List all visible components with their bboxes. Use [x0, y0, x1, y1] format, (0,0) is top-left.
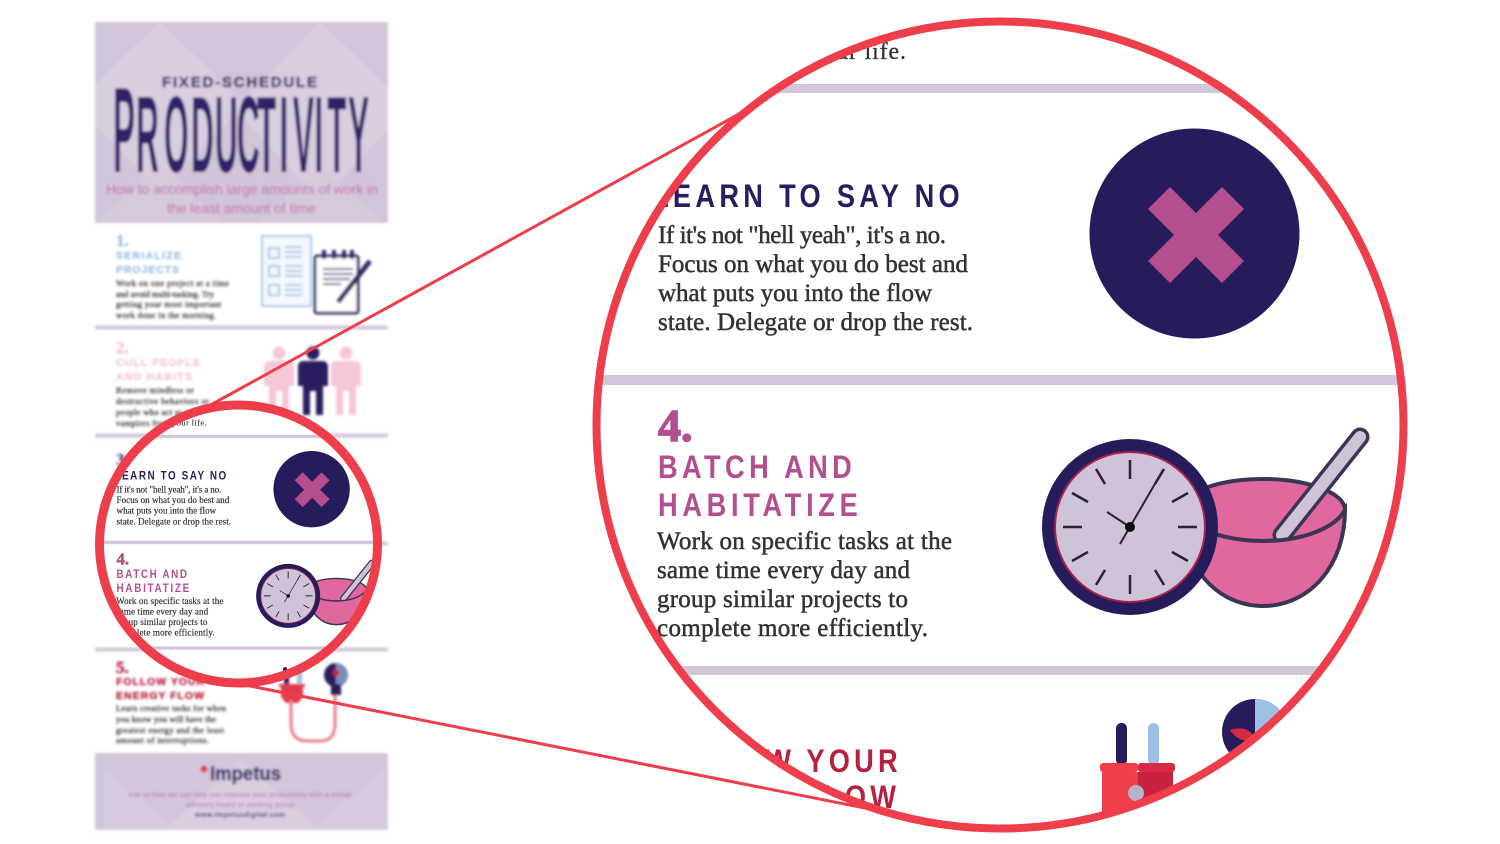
- section 1: serialize projects: 1.: [116, 231, 129, 250]
- section 5: follow your energy flow: greatest energy and the least: [116, 725, 225, 735]
- icon: plug and bulb with cord: [279, 663, 348, 741]
- section 5: follow your energy flow: amount of interruptions.: [116, 735, 209, 745]
- section 2: cull people and habits: Remove mindless or: [116, 385, 194, 395]
- infographic thumbnail (blurred): [95, 22, 388, 830]
- tagline: the least amount of time: [167, 200, 316, 216]
- section 3: learn to say no: LEARN TO SAY NO: [652, 179, 960, 215]
- tagline: How to accomplish large amounts of work in: [106, 181, 378, 197]
- section 2: cull people and habits: CULL PEOPLE: [116, 357, 200, 369]
- footer text: www.impetusdigital.com: [194, 812, 285, 819]
- section 4: batch and habitatize: same time every day and: [657, 557, 910, 584]
- small circle sharp content: [104, 420, 373, 671]
- icon: x in circle: [1090, 128, 1300, 338]
- icon: three people: [264, 346, 361, 415]
- section 3: learn to say no: [652, 179, 973, 336]
- section 5 heading: [767, 749, 897, 808]
- footer text: Ask us how we can help you improve your productivity with a virtual: [128, 792, 351, 799]
- subtitle: fixed-schedule: FIXED-SCHEDULE: [162, 74, 317, 91]
- section 2: cull people and habits: vampires from your life.: [116, 418, 207, 428]
- footer panel: [95, 753, 388, 830]
- section 3: learn to say no: state. Delegate or drop the rest.: [658, 309, 973, 336]
- section 5: follow your energy flow: [116, 658, 227, 745]
- section 2: cull people and habits: 2.: [116, 338, 129, 357]
- section 4: batch and habitatize: [657, 400, 952, 642]
- section 3: learn to say no: If it's not "hell yeah", it's a no.: [658, 222, 946, 249]
- section 4: batch and habitatize: complete more efficiently.: [657, 615, 928, 642]
- section 1: serialize projects: work done in the morning.: [116, 310, 216, 320]
- section 4: batch and habitatize: BATCH AND: [658, 450, 852, 486]
- small circle sharp content: ENERGY FLOW: [114, 688, 204, 701]
- divider lines: [95, 326, 388, 652]
- title: productivity: RODUCTIVITY: [136, 74, 369, 196]
- section 1: serialize projects: PROJECTS: [116, 264, 179, 276]
- section 5: follow your energy flow: Learn creative tasks for when: [116, 703, 227, 713]
- section 5 heading: ENERGY FLOW: [652, 780, 896, 816]
- tagline: [106, 181, 378, 216]
- footer text: advisory board or working group.: [186, 802, 296, 809]
- connector lines: [205, 108, 905, 816]
- small circle sharp content: 4.: [117, 550, 129, 569]
- header panel: [95, 22, 388, 223]
- small circle sharp content: state. Delegate or drop the rest.: [117, 516, 231, 526]
- section 3: learn to say no: Focus on what you do best and: [658, 251, 968, 278]
- section 5: follow your energy flow: FOLLOW YOUR: [116, 676, 204, 688]
- small circle sharp content: complete more efficiently.: [116, 628, 215, 638]
- small circle sharp content: Work on specific tasks at the: [116, 596, 223, 606]
- icon: bowl and spoon: [1181, 437, 1360, 606]
- large circle ring: [596, 22, 1404, 828]
- title: productivity: P: [113, 61, 135, 198]
- small circle sharp content: BATCH AND: [117, 568, 187, 581]
- icon: bulb: [1222, 699, 1280, 752]
- small circle sharp content: LEARN TO SAY NO: [114, 470, 226, 483]
- section 4: batch and habitatize: HABITATIZE: [658, 488, 858, 524]
- section 2: cull people and habits: people who act as energy: [116, 407, 211, 417]
- dividers: [590, 84, 1410, 675]
- logo: impetus: Impetus: [210, 764, 281, 785]
- section 2: cull people and habits: [116, 338, 211, 428]
- section 1: serialize projects: Work on one project at a time: [116, 278, 229, 288]
- section 5: follow your energy flow: 5.: [116, 658, 129, 677]
- section 1: serialize projects: SERIALIZE: [116, 250, 181, 262]
- small circle sharp content: HABITATIZE: [117, 582, 189, 595]
- small magnifier circle: [95, 400, 382, 688]
- section 1: serialize projects: [116, 231, 229, 320]
- section 3 number: 3.: [116, 450, 129, 469]
- small circle sharp content: same time every day and: [116, 606, 209, 616]
- section 1: serialize projects: getting your most important: [116, 299, 222, 309]
- footer text: [128, 792, 351, 819]
- icon: plug: [1100, 723, 1175, 812]
- section 4: batch and habitatize: 4.: [658, 400, 692, 451]
- large circle content: [590, 39, 1410, 834]
- small circle sharp content: If it's not "hell yeah", it's a no.: [117, 485, 221, 495]
- small circle sharp content: what puts you into the flow: [117, 506, 217, 516]
- section 2: cull people and habits: destructive behaviors or: [116, 396, 209, 406]
- small circle sharp content: vampires from your life.: [114, 418, 207, 428]
- section 1: serialize projects: and avoid multi-tasking. Try: [116, 289, 215, 299]
- small circle sharp content: group similar projects to: [116, 617, 208, 627]
- section 2: cull people and habits: AND HABITS: [116, 371, 192, 383]
- large magnifier circle: [590, 22, 1410, 834]
- section 5 heading: FOLLOW YOUR: [652, 744, 898, 780]
- icon: checklist and notepad: [262, 236, 370, 313]
- section 3: learn to say no: what puts you into the flow: [658, 280, 932, 307]
- section 4: batch and habitatize: group similar projects to: [657, 586, 908, 613]
- text: end of section 2: vampires from your life.: [652, 39, 906, 65]
- section 4: batch and habitatize: Work on specific tasks at the: [657, 528, 952, 555]
- small circle ring: [100, 405, 378, 683]
- section 5: follow your energy flow: you know you will have the: [116, 714, 216, 724]
- section 5: follow your energy flow: ENERGY FLOW: [116, 690, 204, 702]
- icon: clock: [1042, 439, 1218, 615]
- small circle sharp content: Focus on what you do best and: [117, 495, 230, 505]
- small circle sharp content: FOLLOW YOUR: [114, 675, 204, 688]
